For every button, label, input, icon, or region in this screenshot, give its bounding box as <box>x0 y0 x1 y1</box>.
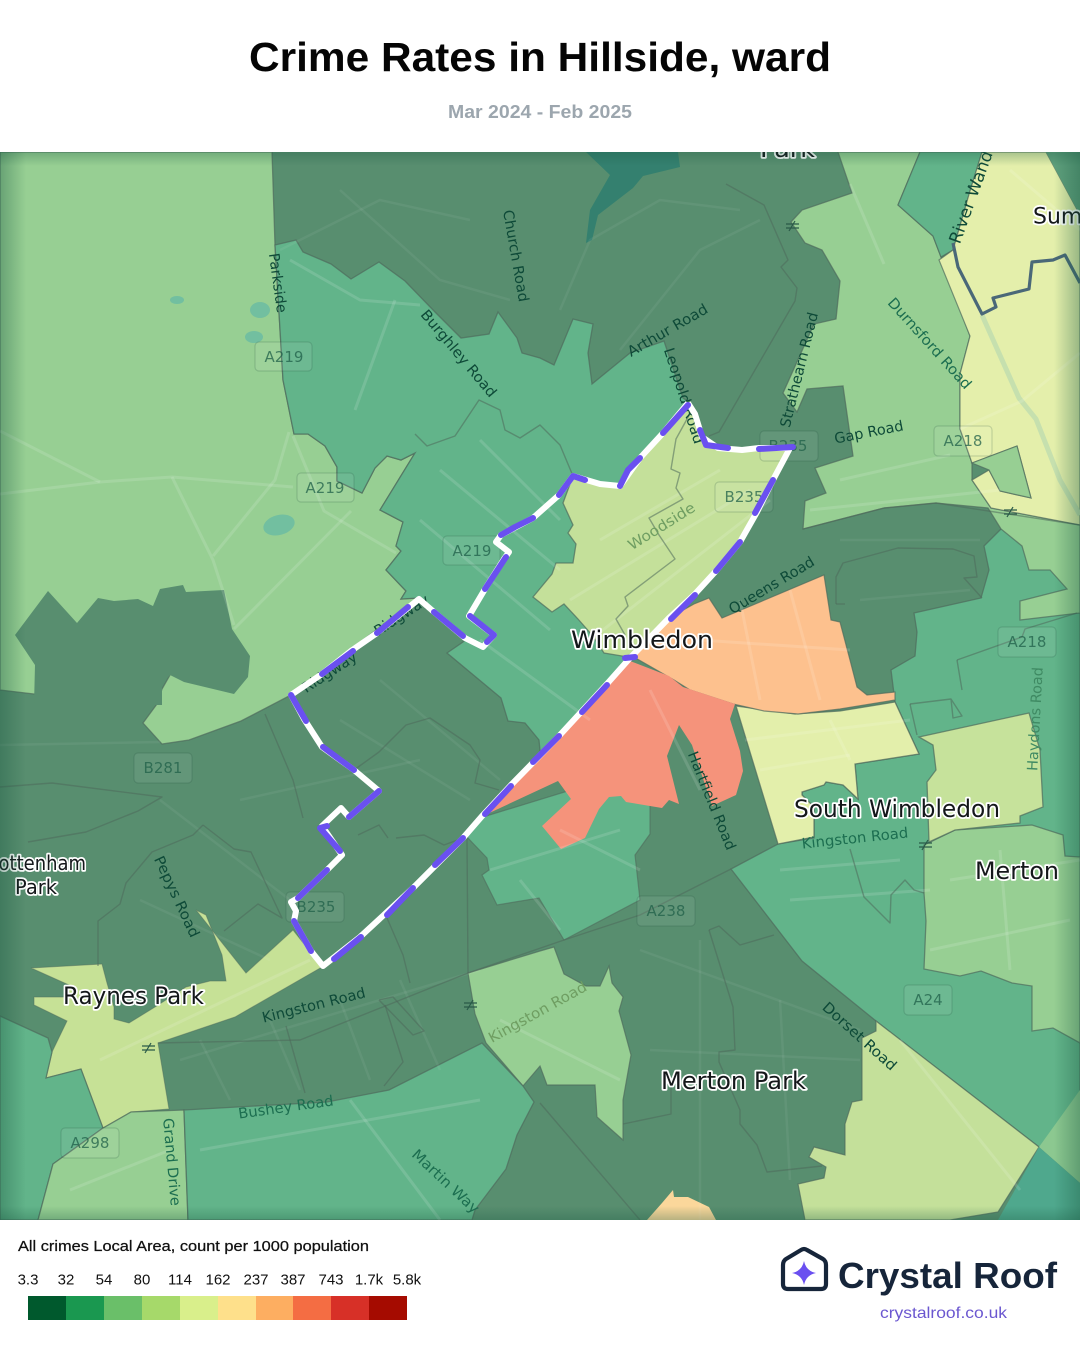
shield A218 south: A218 <box>1008 633 1046 651</box>
legend colour scale <box>28 1296 407 1320</box>
legend tick labels: 237 <box>243 1272 269 1288</box>
legend title: All crimes Local Area, count per 1000 population <box>18 1239 369 1255</box>
region: light green triangle in pale area <box>972 446 1031 498</box>
region: bottom right light <box>1039 1090 1080 1183</box>
region: Wimbledon Common light green <box>0 152 418 744</box>
shield B281 <box>134 753 192 783</box>
label: Ridgway east: Ridgway <box>372 592 433 640</box>
legend tick labels: 3.3 <box>18 1272 38 1288</box>
shield A219 mid <box>297 473 354 502</box>
shield B235 east <box>760 431 818 461</box>
region: South Wimbledon pale yellow <box>736 702 919 844</box>
ward boundary: white line <box>291 403 790 966</box>
shield A219 north <box>255 342 312 371</box>
legend tick labels: 114 <box>168 1272 192 1288</box>
label: Kingston Road Raynes Park: Kingston Road <box>261 985 367 1027</box>
region: bottom right teal <box>998 1147 1080 1220</box>
legend tick labels: 387 <box>280 1272 306 1288</box>
shield A219 ward: A219 <box>453 542 491 560</box>
shield A24: A24 <box>913 991 943 1009</box>
legend tick labels: 743 <box>318 1272 344 1288</box>
place: Cottenham Park line two: Park <box>15 875 57 899</box>
region: central mid green including ward interior <box>275 240 690 757</box>
label: Church Road: Church Road <box>499 209 531 303</box>
label: Pepys Road: Pepys Road <box>150 854 202 940</box>
shield A219 mid: A219 <box>306 479 344 497</box>
label: Hartfield Road: Hartfield Road <box>684 749 738 853</box>
water: small ponds on the common <box>170 296 297 539</box>
shield A298 <box>61 1128 119 1158</box>
map base: lowest crime areas in dark green <box>0 152 1080 1220</box>
shield B235 west <box>286 892 344 922</box>
place: Park at top edge: Park <box>760 135 815 163</box>
label: Parkside: Parkside <box>265 252 289 314</box>
label: Strathearn Road: Strathearn Road <box>778 311 822 429</box>
shield A24 <box>904 985 952 1015</box>
label: Grand Drive: Grand Drive <box>159 1117 183 1207</box>
icon: house with star <box>783 1249 826 1289</box>
region: south central mid green <box>466 790 650 940</box>
legend tick labels <box>18 1272 422 1288</box>
label: Ridgway west: Ridgway <box>300 649 361 697</box>
label: Arthur Road: Arthur Road <box>625 302 711 360</box>
region: Kingston Road light green <box>468 947 631 1140</box>
place: Merton Park: Merton Park <box>661 1067 806 1095</box>
region: south west mid green <box>0 1016 103 1220</box>
shield B235 east: B235 <box>769 437 807 455</box>
internal ward borders <box>0 184 1080 1220</box>
label: River Wandle: River Wandle <box>946 134 1003 246</box>
river trail through pale area <box>982 315 1080 515</box>
region: Summerstown pale yellow <box>939 152 1080 525</box>
region: Merton light green <box>924 825 1080 1043</box>
label: Gap Road: Gap Road <box>833 418 905 448</box>
shield A238: A238 <box>647 902 685 920</box>
label: Bushey Road: Bushey Road <box>237 1093 335 1123</box>
place names <box>0 135 1080 1095</box>
shield B235 in ward <box>715 482 773 512</box>
region: dark blob on the common <box>15 585 250 705</box>
region: Dorset Road yellow green <box>798 1021 1039 1220</box>
rail station markers <box>142 221 1017 1053</box>
shield A218 south <box>998 627 1056 657</box>
region: east mid green <box>731 520 1080 1183</box>
legend tick labels: 1.7k <box>355 1272 384 1288</box>
shield A218 north: A218 <box>944 432 982 450</box>
label: Durnsford Road: Durnsford Road <box>884 295 974 393</box>
label: Leopold Road: Leopold Road <box>660 346 706 446</box>
place: Merton: Merton <box>975 857 1059 885</box>
region: Hillside yellow green Woodside <box>533 403 790 657</box>
shield A238 <box>637 896 695 926</box>
ward boundary: purple dashes <box>291 405 793 959</box>
shield A219 north: A219 <box>265 348 303 366</box>
label: Kingston Road central: Kingston Road <box>486 979 590 1047</box>
legend tick labels: 80 <box>134 1272 150 1288</box>
shield B235 in ward: B235 <box>725 488 763 506</box>
place: Wimbledon: Wimbledon <box>571 626 713 654</box>
legend tick labels: 32 <box>58 1272 74 1288</box>
shield A219 ward <box>443 536 500 565</box>
water: Wimbledon Park lake <box>586 152 680 243</box>
legend tick labels: 5.8k <box>393 1272 422 1288</box>
shield B281: B281 <box>144 759 182 777</box>
subtitle: date range: Mar 2024 - Feb 2025 <box>448 102 632 122</box>
label: Haydons Road: Haydons Road <box>1025 667 1047 771</box>
river Wandle and borough boundary <box>953 243 1080 314</box>
place: Raynes Park: Raynes Park <box>63 982 204 1010</box>
title: Crime Rates in Hillside, ward <box>249 34 831 80</box>
label: Burghley Road: Burghley Road <box>417 307 499 401</box>
region: Raynes Park yellow green <box>31 910 322 1128</box>
region: Bushey Road mid green <box>184 1043 534 1220</box>
legend tick labels: 54 <box>96 1272 112 1288</box>
label: Kingston Road south Wimbledon: Kingston Road <box>801 825 909 853</box>
dark area road network <box>0 190 980 1220</box>
region: north east light green Durnsford <box>783 152 1080 620</box>
road name labels <box>150 134 1047 1217</box>
label: Queens Road: Queens Road <box>726 554 818 618</box>
region: top right corner <box>1046 152 1080 215</box>
road shields <box>61 342 1056 1158</box>
region: salmon high crime area <box>485 661 743 849</box>
shield A218 north <box>934 426 992 456</box>
region: north east mid green patch <box>898 152 982 257</box>
region: bottom pale orange sliver <box>647 1190 716 1220</box>
place: South Wimbledon: South Wimbledon <box>794 795 1000 823</box>
edge vignette <box>0 152 1080 1220</box>
website link text: crystalroof.co.uk <box>880 1305 1008 1322</box>
label: Dorset Road: Dorset Road <box>819 1000 899 1074</box>
shield B235 west: B235 <box>297 898 335 916</box>
region: Wimbledon town orange <box>632 575 895 714</box>
region: south west light green <box>38 1110 188 1220</box>
label: Martin Way: Martin Way <box>408 1147 482 1217</box>
logo: Crystal Roof <box>783 1249 1058 1322</box>
legend <box>18 1239 422 1320</box>
label: Woodside: Woodside <box>626 500 699 554</box>
wordmark: Crystal Roof <box>838 1255 1058 1296</box>
region: Haydons yellow green <box>919 713 1043 842</box>
legend tick labels: 162 <box>205 1272 231 1288</box>
map road network <box>0 170 1080 1220</box>
shield A298: A298 <box>71 1134 109 1152</box>
